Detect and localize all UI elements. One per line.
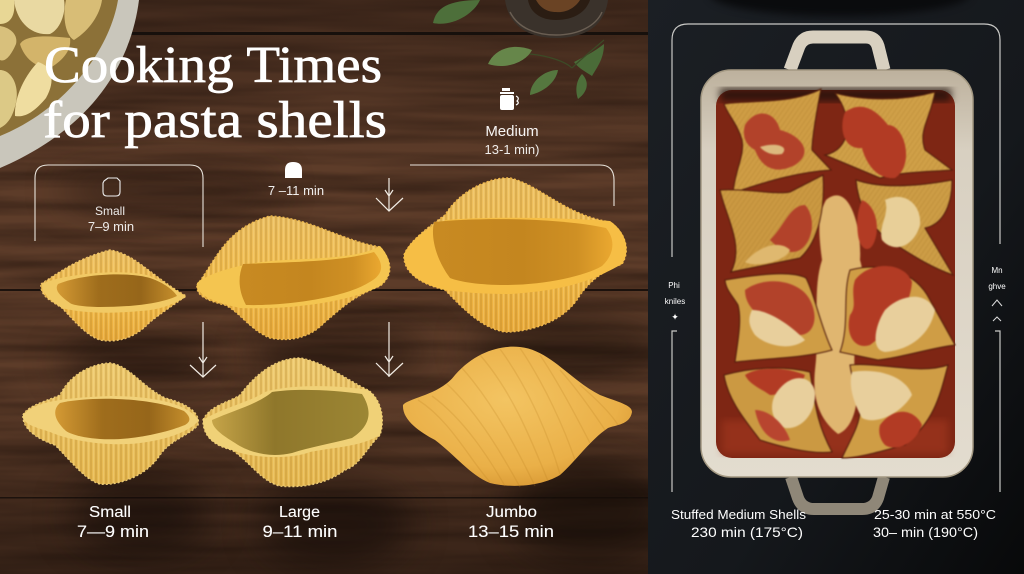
stuffed shell 2 — [825, 92, 952, 178]
side label left: kniles — [665, 297, 685, 306]
arrow top — [376, 178, 403, 211]
arrow right — [376, 322, 403, 377]
shell: top small — [41, 250, 186, 341]
title: for pasta shells — [43, 92, 387, 149]
stuffed shell 8 — [842, 365, 948, 458]
label: medium callout: 13-1 min) — [485, 142, 539, 157]
top leaves and jar — [433, 0, 608, 99]
label: small callout: 7–9 min — [88, 219, 134, 234]
caption: stuffed medium shells: 230 min (175°C) — [691, 524, 803, 540]
frame bracket top — [672, 24, 1000, 257]
side label left: Phi — [668, 281, 680, 290]
caption: baking times — [873, 507, 996, 540]
side label right: Mn — [991, 266, 1003, 275]
dish handle bottom — [791, 477, 884, 509]
stuffed shell 1 — [724, 89, 831, 193]
caption: baking times: 30– min (190°C) — [873, 524, 978, 540]
label: small callout: Small — [95, 204, 125, 218]
label: medium callout — [485, 123, 539, 157]
caption: stuffed medium shells — [671, 507, 807, 540]
baking dish — [701, 37, 973, 509]
label: small — [77, 504, 149, 541]
bracket: small — [35, 165, 203, 247]
stuffed shell 7 — [724, 368, 832, 453]
frame line right — [995, 331, 1000, 492]
panel: dark slate background — [648, 0, 1024, 574]
label: 7-11 min: 7 –11 min — [268, 183, 324, 198]
label: large — [262, 504, 338, 541]
shell: bottom large — [203, 358, 382, 487]
shell: bottom jumbo closed — [403, 347, 632, 487]
shell: top medium — [404, 178, 626, 332]
label: jumbo: Jumbo — [486, 504, 537, 521]
stuffed shell 3 — [720, 175, 823, 272]
side label right: ghve — [988, 282, 1006, 291]
bowl of pasta — [0, 0, 139, 168]
title: Cooking Times — [44, 37, 382, 94]
icon: small pot — [103, 178, 120, 196]
stuffed shell 4 — [856, 180, 953, 275]
side label right — [988, 266, 1006, 321]
stuffed shell 5 — [725, 274, 832, 362]
label: small: Small — [89, 504, 131, 521]
shell: bottom small — [23, 363, 199, 484]
caption: stuffed medium shells: Stuffed Medium Shells — [671, 507, 807, 522]
stuffed shell 6 — [840, 266, 955, 360]
bracket: medium — [410, 165, 614, 206]
label: medium callout: Medium — [485, 123, 539, 140]
panel: wood table background — [0, 0, 670, 574]
melted cheese centre — [814, 195, 863, 434]
dish handle top — [790, 37, 884, 70]
title — [43, 37, 387, 149]
arrow left — [190, 322, 216, 377]
side label left — [665, 281, 685, 322]
caption: baking times: 25-30 min at 550°C — [874, 507, 996, 522]
label: small: 7—9 min — [77, 523, 149, 541]
label: jumbo — [468, 504, 554, 541]
frame line left — [672, 331, 677, 492]
label: jumbo: 13–15 min — [468, 523, 554, 541]
label: large: 9–11 min — [262, 523, 338, 541]
icon: dome — [285, 162, 302, 178]
icon: pitcher — [500, 88, 518, 110]
side label left: ✦ — [671, 312, 679, 322]
label: small callout — [88, 204, 134, 234]
shell: top large — [197, 216, 390, 339]
label: large: Large — [279, 504, 320, 521]
